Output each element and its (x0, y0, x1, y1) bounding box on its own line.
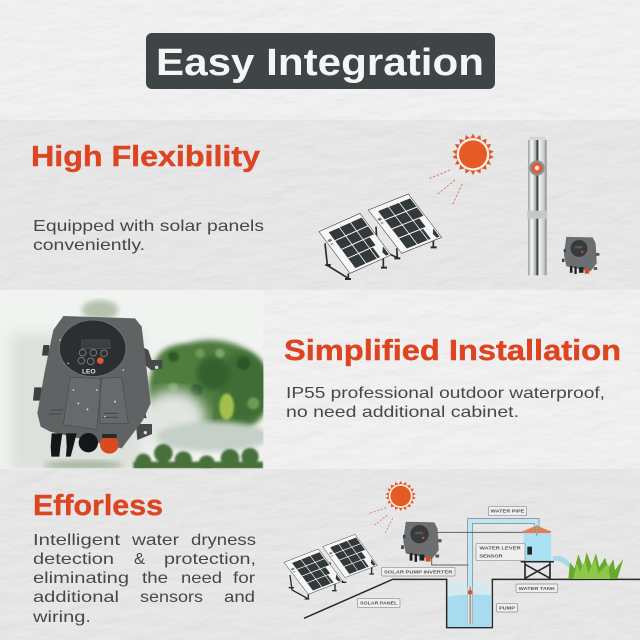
icon: solar panel small right (323, 534, 377, 578)
icon: inverter (562, 237, 599, 274)
text block: efforless: & (134, 551, 145, 568)
solar panel stands (325, 227, 437, 279)
ground line and well (304, 579, 640, 628)
text block: efforless: dryness (191, 532, 256, 549)
icon: pump small (467, 587, 473, 624)
text block: simplified installation (286, 385, 605, 421)
diagram: solar pump system (284, 481, 640, 628)
arrows: sun rays (428, 170, 462, 205)
label: pump: PUMP (499, 605, 516, 611)
text block: efforless: detection (33, 551, 114, 568)
icon: inverter small (401, 522, 442, 562)
icon: water tank (521, 525, 554, 579)
label: solar panel: SOLAR PANEL (360, 601, 397, 607)
icon: solar panel right (368, 194, 442, 253)
label: solar pump inverter (382, 567, 455, 576)
water in well (448, 582, 492, 627)
photo background (0, 290, 272, 473)
text block: high flexibility: Equipped with solar panels (33, 218, 264, 235)
icon: sun (452, 134, 494, 175)
title: Easy Integration (156, 42, 484, 84)
icon: solar panel small left (284, 549, 343, 594)
arrows: sun rays small (368, 508, 393, 533)
label: solar pump inverter: SOLAR PUMP INVERTER (384, 569, 453, 575)
label: water tank: WATER TANK (519, 586, 555, 592)
text block: efforless: Intelligent (33, 532, 121, 549)
text block: simplified installation: no need additional cabinet. (286, 404, 519, 421)
label: water lever sensor: WATER LEVER (479, 545, 521, 551)
text block: efforless: water (131, 532, 180, 549)
text block: efforless (32, 532, 256, 626)
label: pump (497, 603, 517, 612)
text block: simplified installation: IP55 professional outdoor waterproof, (286, 385, 605, 402)
text block: high flexibility (33, 218, 264, 254)
label: water lever sensor (476, 543, 525, 561)
photo: inverter in rain with trees (0, 290, 272, 473)
orange cable gland (100, 434, 119, 454)
text block: efforless: the (142, 570, 168, 587)
label: water lever sensor: SENSOR (479, 553, 503, 559)
label: water pipe: WATER PIPE (491, 509, 525, 515)
text block: efforless: wiring. (32, 609, 91, 626)
text block: high flexibility: conveniently. (33, 237, 145, 254)
text block: efforless: sensors (140, 589, 203, 606)
water pipe (470, 521, 537, 588)
sensor wires (432, 532, 530, 565)
inverter device: LEO (82, 368, 96, 375)
heading: high flexibility: High Flexibility (31, 141, 260, 173)
heading: efforless: Efforless (33, 490, 163, 522)
icon: solar panel left (319, 213, 391, 273)
inverter device (33, 316, 162, 457)
text block: efforless: for (233, 570, 256, 587)
panel: efforless band (0, 469, 640, 640)
text block: efforless: and (224, 589, 255, 606)
text block: efforless: need (181, 570, 222, 587)
label: solar panel (357, 599, 400, 607)
text block: efforless: protection, (164, 551, 256, 568)
icon: grass (568, 552, 623, 579)
solar panel stands small (289, 562, 374, 599)
water spray (553, 556, 575, 577)
text block: efforless: eliminating (33, 570, 129, 587)
label: water pipe (488, 507, 527, 516)
text block: efforless: additional (33, 589, 119, 606)
label: water tank (516, 584, 558, 593)
heading: simplified installation: Simplified Installation (284, 335, 621, 367)
title (146, 33, 495, 89)
icon: sun small (386, 481, 416, 511)
icon: submersible pump (527, 137, 547, 275)
panel: high flexibility band (0, 120, 640, 290)
illustration: solar panels, sun, pump and inverter (319, 134, 599, 279)
